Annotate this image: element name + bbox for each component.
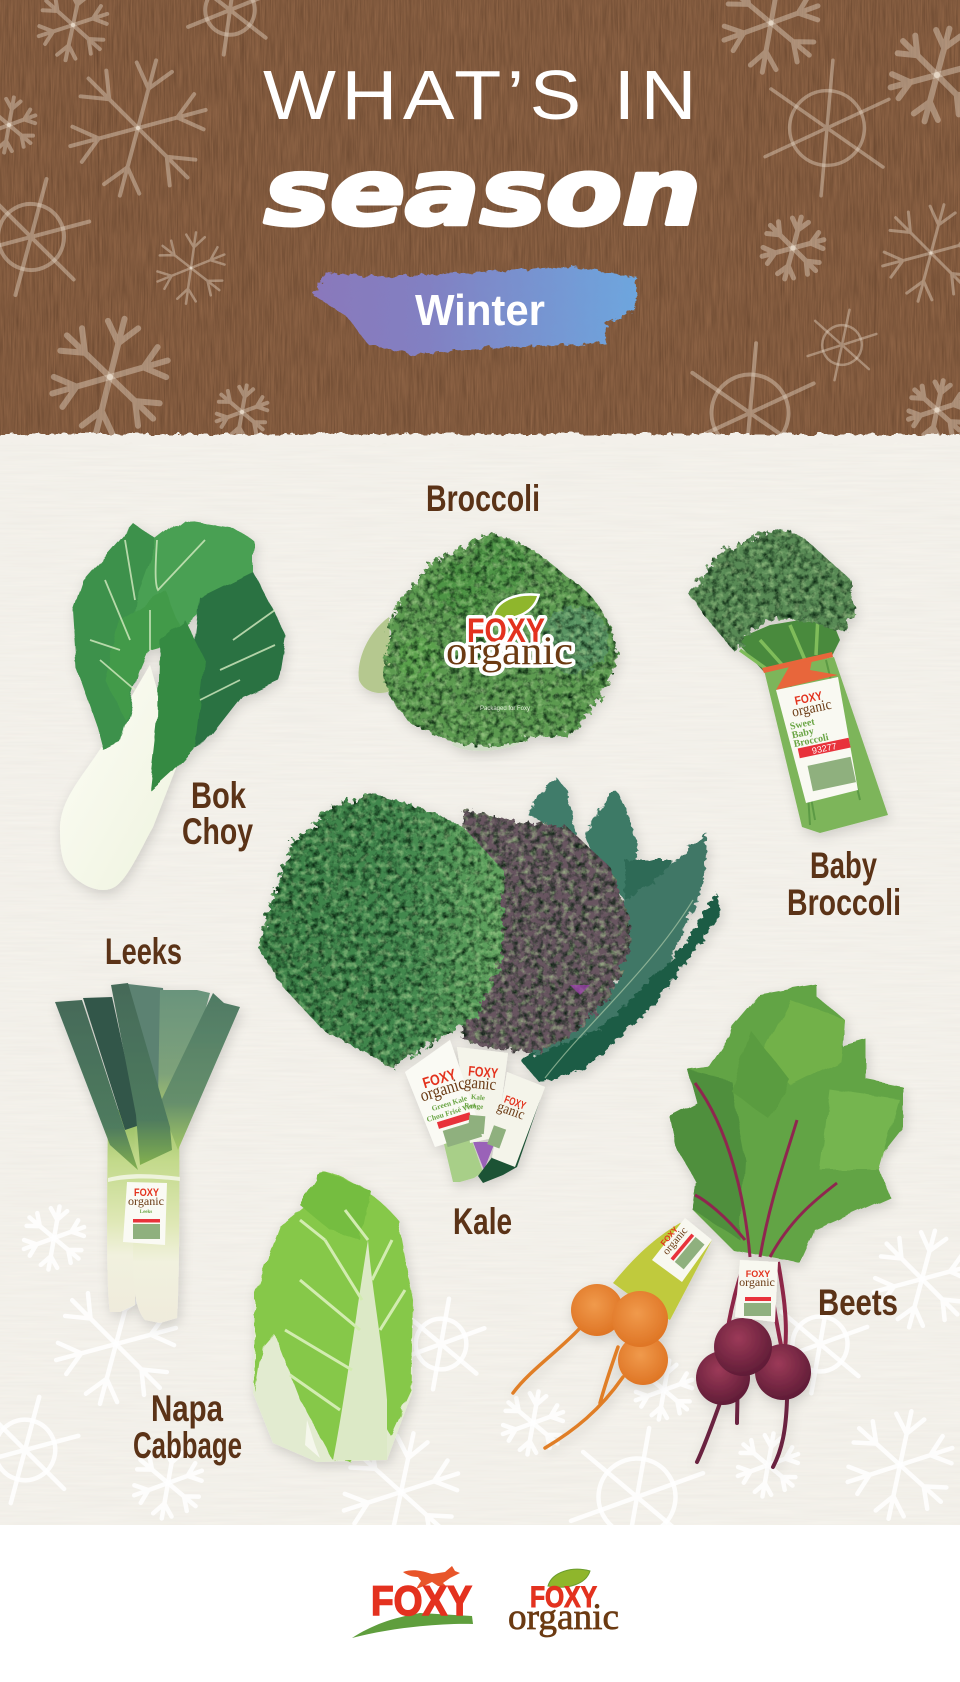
title: WHAT’S IN <box>263 56 702 134</box>
green kale <box>258 793 503 1068</box>
vegetable: kale bunch: Kale <box>471 1093 485 1102</box>
label: Napa Cabbage: Napa <box>151 1388 223 1429</box>
vegetable: kale bunch <box>258 778 720 1183</box>
label: kale tags <box>492 1072 545 1167</box>
vegetable: beets <box>513 985 903 1467</box>
vegetable: baby broccoli: Broccoli <box>793 732 830 750</box>
vegetable: kale bunch: FOXY <box>502 1094 528 1113</box>
vegetable: leeks <box>55 983 240 1323</box>
gold beet tag <box>652 1218 712 1282</box>
title <box>263 56 702 246</box>
lacinato leaves <box>520 778 720 1083</box>
vegetable: baby broccoli: organic <box>791 697 833 721</box>
label: Napa Cabbage: Cabbage <box>133 1425 242 1466</box>
vegetable: kale bunch: organic <box>418 1073 467 1105</box>
vegetable: leeks: FOXY <box>134 1187 160 1199</box>
vegetable: bok choy <box>60 520 287 890</box>
logo: Foxy <box>352 1566 473 1638</box>
label: Bok Choy: Choy <box>182 811 253 852</box>
vegetable: baby broccoli: 93277 <box>811 741 838 756</box>
label: Broccoli: Broccoli <box>426 478 540 519</box>
label: Napa Cabbage <box>133 1388 242 1466</box>
brush badge: Winter <box>313 267 637 355</box>
red beet stems <box>725 1262 786 1350</box>
title: season <box>264 139 701 246</box>
logo on broccoli: organic <box>446 628 573 673</box>
vegetable: baby broccoli: Baby <box>791 726 815 741</box>
panel: wood header <box>0 0 960 436</box>
vegetable: beets: FOXY <box>746 1269 770 1279</box>
stems <box>443 1135 483 1182</box>
vegetable: beets: FOXY <box>659 1225 680 1248</box>
vegetable: kale bunch: ganic <box>495 1099 527 1124</box>
vegetable: kale bunch: Rouge <box>464 1101 484 1111</box>
vegetable: baby broccoli <box>690 530 888 833</box>
vegetable: beets: organic <box>739 1275 775 1289</box>
label: Bok Choy <box>182 775 253 852</box>
label: Beets: Beets <box>818 1282 898 1323</box>
vegetable: napa cabbage <box>253 1170 413 1462</box>
vegetable: kale bunch: FOXY <box>421 1066 458 1092</box>
logo: Foxy Organic: FOXY <box>530 1581 597 1614</box>
decorative white snowflakes on paper <box>0 1204 960 1525</box>
beet greens <box>670 985 903 1263</box>
gold beet stems <box>613 1223 712 1320</box>
red beet roots <box>697 1383 787 1467</box>
vegetable: baby broccoli: Sweet <box>789 716 816 733</box>
logo: Foxy Organic <box>508 1569 619 1638</box>
vegetable: leeks: organic <box>128 1194 164 1208</box>
vegetable: beets: organic <box>660 1225 690 1257</box>
vegetable: kale bunch: FOXY <box>468 1063 499 1081</box>
vegetable: baby broccoli: FOXY <box>793 688 824 708</box>
panel: paper background <box>0 434 960 1525</box>
label: Baby Broccoli: Baby <box>810 845 877 886</box>
vegetable: broccoli <box>359 534 618 751</box>
gold beet roots <box>513 1328 623 1448</box>
vegetable: leeks: Leeks <box>140 1210 152 1215</box>
logo on broccoli: Packaged for Foxy <box>480 706 530 712</box>
vegetable: kale bunch: ganic <box>463 1072 497 1094</box>
label: Leeks: Leeks <box>105 931 182 972</box>
red beet tag <box>735 1260 778 1322</box>
decorative snowflakes on wood <box>0 0 960 488</box>
brush badge: Winter: Winter <box>415 286 545 335</box>
label: Kale: Kale <box>453 1201 512 1242</box>
label: Baby Broccoli: Broccoli <box>787 882 901 923</box>
logo on broccoli <box>446 596 573 712</box>
vegetable: kale bunch: Green Kale <box>430 1093 469 1113</box>
purple kale <box>463 810 630 1053</box>
vegetable: kale bunch: Chou Frisé Vert <box>425 1100 478 1124</box>
logo on broccoli: FOXY <box>467 612 545 650</box>
logo: Foxy Organic: organic <box>508 1597 619 1638</box>
label: Baby Broccoli <box>787 845 901 923</box>
label: Bok Choy: Bok <box>191 775 246 816</box>
logo: Foxy: FOXY <box>371 1577 472 1624</box>
